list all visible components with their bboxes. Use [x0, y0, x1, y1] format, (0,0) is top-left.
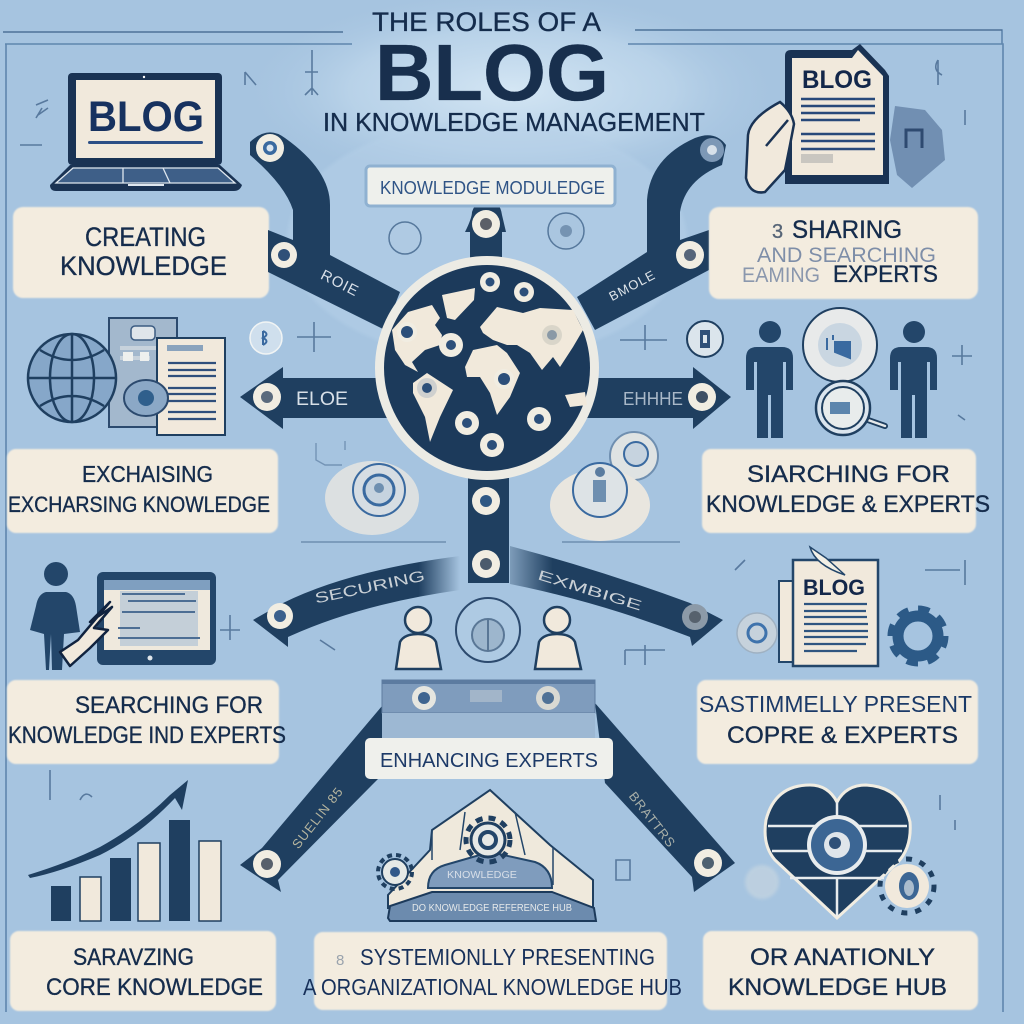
arrow: top stem	[465, 198, 506, 265]
arrow: top right curved branch	[577, 135, 726, 330]
panel: summarizing core knowledge: SARAVZING	[73, 944, 194, 971]
icon: swirl left	[301, 441, 446, 542]
title line: the roles of a: THE ROLES OF A	[372, 7, 601, 37]
hand	[746, 102, 794, 192]
panel: searching for knowledge and experts right: KNOWLEDGE & EXPERTS	[706, 491, 990, 518]
arrow: far lower right branch	[595, 703, 735, 892]
title line: in knowledge management: IN KNOWLEDGE MANAGEMENT	[323, 107, 705, 137]
panel: knowledge moduledge: KNOWLEDGE MODULEDGE	[380, 178, 605, 198]
icon: globe document and eye	[28, 318, 225, 435]
panel: sharing and searching among experts: AND SEARCHING	[757, 244, 936, 267]
panel: searching for knowledge and experts left: KNOWLEDGE IND EXPERTS	[8, 722, 286, 749]
panel: organizationally knowledge hub: OR ANATIONLY	[750, 944, 935, 971]
panel: systemically present core and experts: COPRE & EXPERTS	[727, 722, 958, 749]
icon: badge behind tablet	[890, 106, 945, 188]
panel: systemically presenting knowledge hub: A ORGANIZATIONAL KNOWLEDGE HUB	[303, 974, 682, 1000]
panel: systemically present core and experts: SASTIMMELLY PRESENT	[699, 691, 972, 717]
panel: creating knowledge: CREATING	[85, 222, 206, 252]
icon: knowledge hub building with gears: KNOWLEDGE	[447, 870, 517, 881]
arrow: top left curved branch	[250, 132, 400, 330]
icon: laptop with blog screen: BLOG	[88, 93, 204, 141]
icon: heart with gear	[745, 785, 934, 918]
arrow: left: ELOE	[296, 389, 348, 410]
icon: document with gear: BLOG	[803, 575, 865, 600]
icon: tablet with blog page held in hand: BLOG	[802, 66, 872, 94]
panel: organizationally knowledge hub	[703, 931, 978, 1010]
icon: document with gear	[737, 547, 944, 666]
decorative tick marks	[20, 50, 972, 880]
icon: laptop with blog screen	[50, 73, 242, 191]
arrow: right: EHHHE	[623, 389, 683, 409]
panel: systemically present core and experts	[697, 680, 978, 764]
panel: sharing and searching among experts: 3	[772, 221, 783, 243]
panel: sharing and searching among experts: EAMING	[742, 264, 820, 287]
panel: systemically presenting knowledge hub	[303, 932, 682, 1010]
icon: stacked platform	[382, 680, 595, 740]
arrow: left	[240, 367, 400, 429]
arrow: bottom stem	[468, 478, 509, 583]
chart: rising bars with trend arrow	[28, 780, 221, 921]
panel: enhancing experts: ENHANCING EXPERTS	[380, 750, 598, 772]
panel: systemically presenting knowledge hub: SYSTEMIONLLY PRESENTING	[360, 944, 655, 970]
panel: exchanging knowledge: EXCHARSING KNOWLEDGE	[8, 492, 270, 517]
panel: summarizing core knowledge: CORE KNOWLEDGE	[46, 974, 263, 1001]
arrow: lower left branch	[253, 556, 460, 647]
panel: searching for knowledge and experts right	[702, 449, 990, 533]
panel: summarizing core knowledge	[10, 931, 276, 1011]
arrow: top right curved branch: BMOLE	[606, 267, 658, 304]
icon: swirl right	[550, 432, 680, 542]
icon: two people with magnifier	[746, 308, 937, 438]
icon: two people and circle	[396, 598, 581, 669]
panel: searching for knowledge and experts left: SEARCHING FOR	[75, 692, 263, 719]
panel: knowledge moduledge	[366, 166, 615, 206]
arrow: far lower left branch	[240, 706, 382, 892]
arrow: right	[580, 367, 731, 429]
title word: blog: BLOG	[375, 28, 609, 117]
arrow: lower right branch: EXMBIGE	[536, 567, 644, 613]
title	[323, 7, 705, 137]
small circle markers	[250, 213, 723, 357]
icon: knowledge hub building with gears	[378, 790, 596, 921]
panel: searching for knowledge and experts left	[7, 680, 286, 764]
icon: person pointing at tablet	[30, 562, 216, 670]
panel: searching for knowledge and experts right: SIARCHING FOR	[747, 461, 950, 488]
panel: enhancing experts	[365, 738, 613, 779]
panel: creating knowledge: KNOWLEDGE	[60, 251, 227, 281]
icon: knowledge hub building with gears: DO KNOWLEDGE REFERENCE HUB	[412, 903, 572, 914]
icon: tablet with blog page held in hand	[746, 44, 889, 192]
panel: sharing and searching among experts: EXPERTS	[833, 261, 938, 288]
panel: sharing and searching among experts: SHARING	[792, 216, 902, 244]
panel: exchanging knowledge	[7, 449, 278, 533]
panel: organizationally knowledge hub: KNOWLEDGE HUB	[728, 974, 947, 1001]
globe	[375, 256, 599, 480]
panel: creating knowledge	[13, 207, 269, 298]
panel: exchanging knowledge: EXCHAISING	[82, 461, 213, 487]
arrow: far lower left branch: SUELIN 85	[289, 784, 346, 851]
world map continents	[392, 288, 587, 442]
map nodes	[397, 272, 562, 457]
arrow: far lower right branch: BRATTRS	[626, 789, 679, 851]
panel: sharing and searching among experts	[709, 207, 978, 299]
arrow: lower right branch	[510, 546, 723, 646]
arrow: lower left branch: SECURING	[313, 568, 426, 607]
arrow: top left curved branch: ROIE	[318, 267, 362, 300]
panel: systemically presenting knowledge hub: 8	[336, 952, 344, 969]
